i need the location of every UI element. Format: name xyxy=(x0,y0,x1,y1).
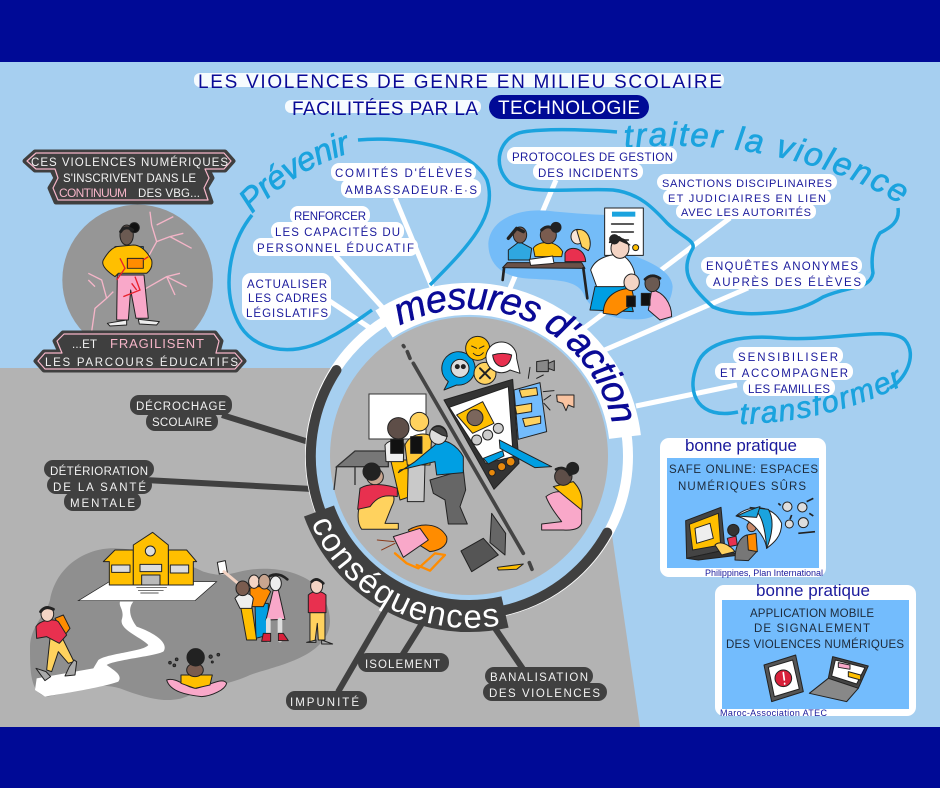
central scene illustration xyxy=(334,336,582,572)
social media bubbles xyxy=(442,336,520,390)
label: enquêtes: AUPRÈS DES ÉLÈVES xyxy=(713,276,861,289)
title xyxy=(194,72,724,120)
student figure xyxy=(103,223,159,326)
grey consequences zone xyxy=(0,368,640,727)
heading: prévenir: Prévenir xyxy=(240,132,348,214)
dashed divider xyxy=(403,346,532,569)
label: impunité xyxy=(286,691,367,710)
label: sanctions: SANCTIONS DISCIPLINAIRES xyxy=(662,178,832,190)
label: sensibiliser: SENSIBILISER xyxy=(738,352,838,364)
label: comités d'élèves: AMBASSADEUR·E·S xyxy=(345,185,477,197)
illustration: school scene xyxy=(30,532,333,700)
label: renforcer les capacités xyxy=(253,206,418,256)
certificate xyxy=(605,208,643,255)
label: sensibiliser xyxy=(715,347,853,396)
label: banalisation des violences: BANALISATION xyxy=(490,672,588,684)
label: sanctions xyxy=(657,174,837,219)
seated girl left xyxy=(358,463,398,529)
label: actualiser les cadres: LES CADRES xyxy=(248,293,327,305)
red cracks on figure xyxy=(117,257,148,297)
label: comités d'élèves xyxy=(331,163,481,198)
heading: transformer: transformer xyxy=(740,370,899,424)
blue blobs xyxy=(488,210,673,319)
isolated student xyxy=(307,579,333,644)
bottom navy band xyxy=(0,727,940,788)
label: renforcer les capacités: RENFORCER xyxy=(294,211,366,223)
main circle: ring and grey disc xyxy=(310,297,628,615)
card heading: bonne pratique xyxy=(756,581,870,600)
label: sanctions: AVEC LES AUTORITÉS xyxy=(681,206,811,219)
group of bullies xyxy=(385,412,467,524)
label: renforcer les capacités: LES CAPACITÉS DU xyxy=(275,226,400,239)
card: application mobile: APPLICATION MOBILE xyxy=(750,608,874,620)
grey blob xyxy=(30,548,330,700)
label: décrochage scolaire: SCOLAIRE xyxy=(152,417,212,429)
callout: et fragilisent: ...ET xyxy=(72,339,97,351)
dark connector lines xyxy=(145,415,525,692)
callout: et fragilisent xyxy=(36,333,244,370)
label: banalisation des violences xyxy=(483,667,607,701)
seated girl right xyxy=(542,462,582,530)
platform xyxy=(78,582,217,601)
label: détérioration santé mentale: DÉTÉRIORATION xyxy=(50,465,148,478)
card: application mobile: Maroc-Association ATEC xyxy=(720,708,828,718)
transformer loop line xyxy=(693,334,910,414)
label: actualiser les cadres: LÉGISLATIFS xyxy=(246,307,328,320)
label: décrochage scolaire xyxy=(130,395,232,431)
label: enquêtes xyxy=(701,257,866,289)
white connector lines xyxy=(328,180,748,406)
label: sanctions: ET JUDICIAIRES EN LIEN xyxy=(668,193,826,205)
fallen laptop and pencil xyxy=(461,513,523,572)
group taking a selfie xyxy=(217,561,288,641)
card: application mobile xyxy=(715,581,916,718)
label: décrochage scolaire: DÉCROCHAGE xyxy=(136,400,226,413)
top navy band xyxy=(0,0,940,62)
card: application mobile: DES VIOLENCES NUMÉRIQUES xyxy=(726,638,904,651)
student walking away xyxy=(36,607,77,681)
icon: tablet and laptop xyxy=(764,655,868,702)
whiteboard xyxy=(369,394,426,439)
table xyxy=(334,451,388,490)
grey circle xyxy=(62,205,213,355)
label: isolement: ISOLEMENT xyxy=(365,659,440,671)
label: protocoles: DES INCIDENTS xyxy=(538,168,638,180)
callout: et fragilisent: FRAGILISENT xyxy=(110,336,204,351)
smartphone with harassment xyxy=(444,360,574,489)
label: protocoles xyxy=(507,147,677,180)
label: banalisation des violences: DES VIOLENCES xyxy=(489,688,600,700)
illustration: treating violence xyxy=(488,208,673,320)
card: safe online xyxy=(660,436,826,578)
ribbon: conséquences: conséquences xyxy=(314,519,498,628)
card heading: bonne pratique xyxy=(685,436,797,455)
callout: ces violences numériques: DES VBG... xyxy=(138,188,200,200)
label: détérioration santé mentale xyxy=(44,460,154,511)
label: impunité: IMPUNITÉ xyxy=(290,696,359,709)
callout: ces violences numériques xyxy=(25,152,233,202)
ribbon: mesures d'action: mesures d'action xyxy=(396,288,632,422)
callout: ces violences numériques: CES VIOLENCES NUMÉRIQUES xyxy=(31,156,228,169)
label: sensibiliser: LES FAMILLES xyxy=(748,384,830,396)
label: protocoles: PROTOCOLES DE GESTION xyxy=(512,152,673,164)
card: safe online: NUMÉRIQUES SÛRS xyxy=(678,480,806,493)
callout: ces violences numériques: CONTINUUM xyxy=(59,186,127,200)
panel: continuum illustration xyxy=(62,205,213,355)
title: TECHNOLOGIE xyxy=(498,98,640,119)
label: enquêtes: ENQUÊTES ANONYMES xyxy=(706,260,858,273)
label: actualiser les cadres xyxy=(242,273,331,320)
label: détérioration santé mentale: DE LA SANTÉ xyxy=(53,481,146,494)
heading: traiter la violence: traiter la violence xyxy=(624,121,907,202)
icon: screen, children and umbrella xyxy=(686,498,815,561)
title: FACILITÉES PAR LA xyxy=(292,99,478,120)
callout: ces violences numériques: S'INSCRIVENT DANS LE xyxy=(63,173,196,185)
label: comités d'élèves: COMITÉS D'ÉLÈVES xyxy=(335,167,472,180)
card: safe online: Philippines, Plan International xyxy=(705,568,823,578)
distressed sitting student xyxy=(167,649,227,697)
label: sensibiliser: ET ACCOMPAGNER xyxy=(720,368,848,380)
school building xyxy=(103,532,197,593)
cracks xyxy=(88,212,192,332)
label: renforcer les capacités: PERSONNEL ÉDUCATIF xyxy=(257,242,414,255)
label: isolement xyxy=(358,653,449,672)
students at table xyxy=(503,222,590,298)
label: détérioration santé mentale: MENTALE xyxy=(70,498,135,510)
card: safe online: SAFE ONLINE: ESPACES xyxy=(669,464,818,476)
card: application mobile: DE SIGNALEMENT xyxy=(754,623,870,635)
teacher and students with phones xyxy=(590,235,672,320)
title: LES VIOLENCES DE GENRE EN MILIEU SCOLAIRE xyxy=(198,72,722,93)
road xyxy=(35,602,165,697)
prévenir loop line xyxy=(229,139,489,350)
traiter loop line xyxy=(499,130,898,314)
label: actualiser les cadres: ACTUALISER xyxy=(247,279,327,291)
callout: et fragilisent: LES PARCOURS ÉDUCATIFS xyxy=(45,356,238,369)
fallen backpack and notebook xyxy=(377,525,447,571)
